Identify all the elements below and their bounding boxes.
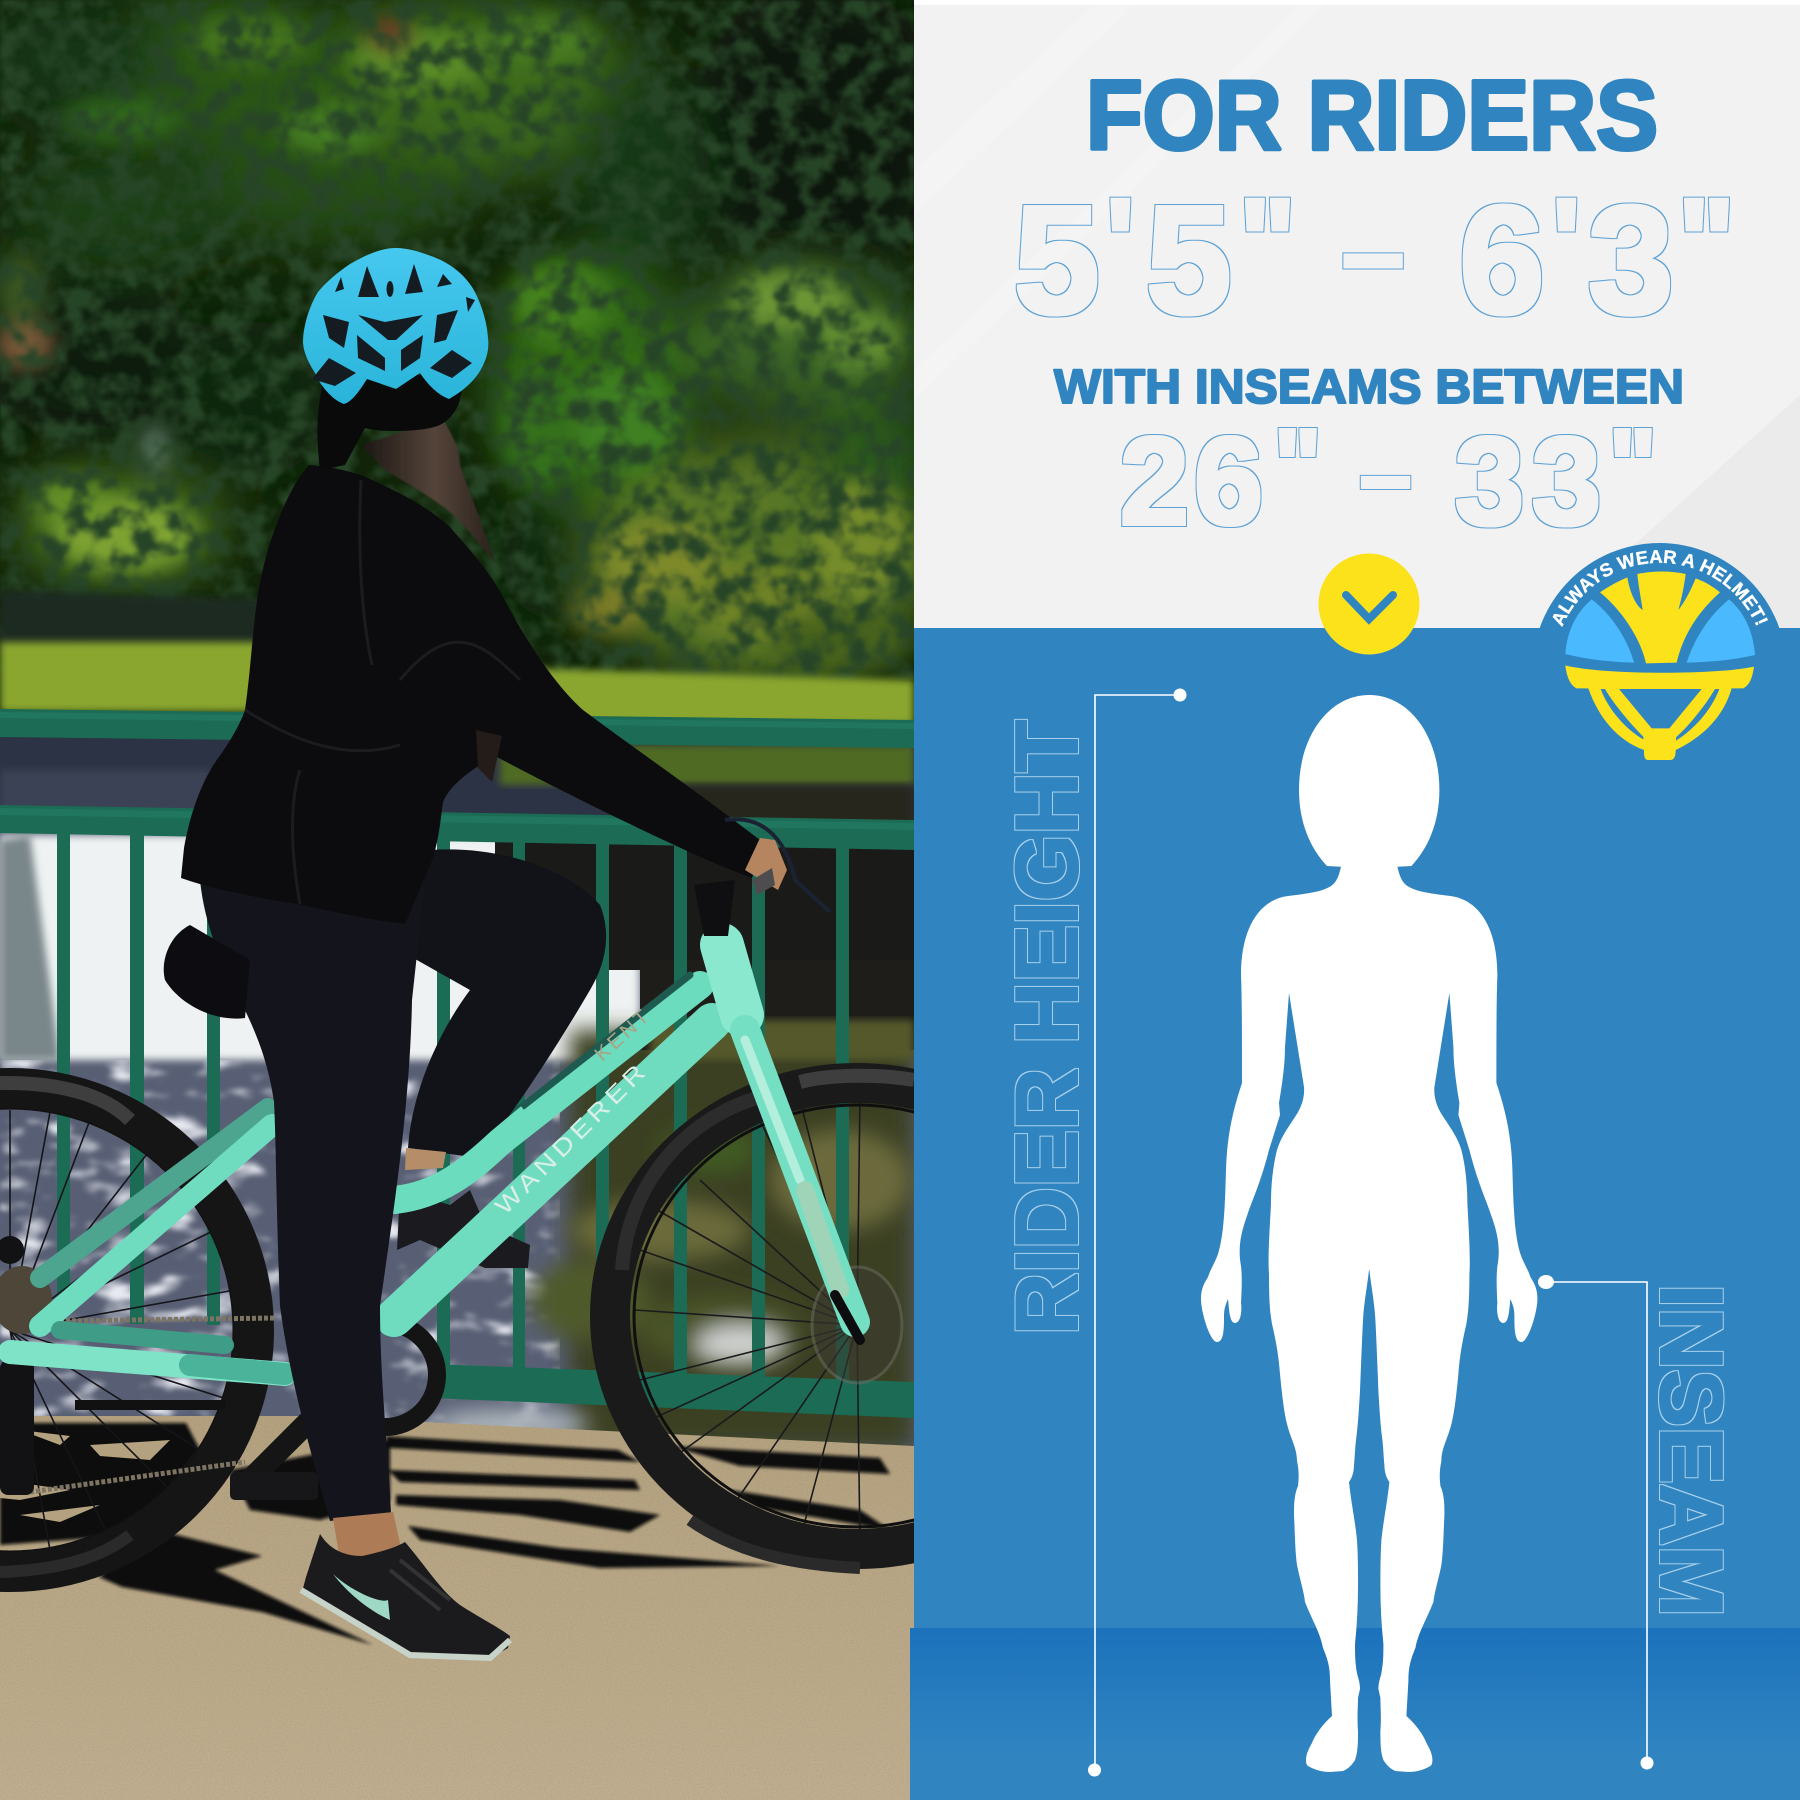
- yellow chevron badge: [1318, 554, 1420, 654]
- rider jacket: [181, 465, 764, 924]
- dark river bank: [0, 590, 257, 644]
- human silhouette: [1201, 695, 1537, 1772]
- outlined inseam range: 2: [1120, 413, 1189, 551]
- hand and grip: [694, 819, 830, 936]
- water behind upper rail: [0, 735, 914, 825]
- chainring: [380, 1323, 446, 1436]
- panel: rider photo: [0, 0, 914, 1800]
- subheading: inseams: WITH INSEAMS BETWEEN: [1054, 361, 1684, 414]
- helmet badge: [1540, 543, 1780, 760]
- light spots inside rear wheel shadow: [0, 1430, 170, 1522]
- outlined inseam range: ": [1274, 409, 1321, 521]
- rider ankle: [333, 1512, 402, 1560]
- helmet centre vent: [386, 281, 394, 297]
- waterfall and rocks below: [0, 830, 914, 1450]
- inseam label: INSEAM: [1642, 1284, 1741, 1617]
- pavement grain: [0, 1416, 914, 1800]
- silhouette right half: [1367, 695, 1537, 1772]
- pavement shadows: [0, 1423, 890, 1645]
- chain: [30, 1318, 275, 1492]
- outlined inseam range: 3: [1532, 413, 1601, 551]
- rear wheel: [0, 1083, 254, 1572]
- jacket seams: [245, 480, 520, 904]
- heading: for riders: FOR RIDERS: [1086, 60, 1658, 170]
- outlined height range: ": [1239, 174, 1296, 308]
- outlined height range: 5: [1146, 174, 1232, 346]
- helmet icon: [1565, 571, 1755, 760]
- inseam measure line: [1538, 1275, 1654, 1770]
- pavement: [0, 1416, 914, 1800]
- outlined inseam range: 6: [1194, 413, 1263, 551]
- pedal: [230, 1472, 318, 1500]
- top tube model label: KENT: [591, 1004, 656, 1066]
- rear derailleur and cassette: [0, 1236, 225, 1495]
- rider standing leg: [200, 880, 425, 1521]
- outlined height range: –: [1342, 190, 1404, 315]
- rider shoe: [301, 1534, 510, 1658]
- outlined inseam range: –: [1360, 425, 1411, 527]
- frame top tube over shin: [395, 1117, 530, 1200]
- saddle: [164, 925, 250, 1019]
- outlined inseam range: ": [1609, 409, 1656, 521]
- helmet: [303, 248, 488, 404]
- outlined height range: 6: [1459, 174, 1545, 346]
- fence rail highlight: [0, 712, 914, 830]
- outlined height range: ': [1106, 174, 1135, 308]
- raised leg ankle: [405, 1148, 446, 1170]
- fence: [0, 709, 914, 1418]
- rider hair: [361, 419, 495, 562]
- outlined height range: ': [1552, 174, 1581, 308]
- helmet vents: [312, 264, 475, 386]
- brake disc: [812, 1267, 902, 1383]
- re-drawn down tube over shoe: [394, 1163, 560, 1318]
- outlined height range: ": [1678, 174, 1735, 308]
- rider height label: RIDER HEIGHT: [997, 720, 1096, 1335]
- outlined inseam range: 3: [1455, 413, 1524, 551]
- rider height measure line: [1088, 688, 1186, 1776]
- panel: rider info background: [914, 0, 1800, 1800]
- outlined height range: 3: [1588, 174, 1674, 346]
- green pond: [0, 642, 914, 725]
- badge arc text: ALWAYS WEAR A HELMET!: [1552, 550, 1768, 627]
- head under helmet: [318, 375, 462, 470]
- frame lettering: WANDERER: [490, 1056, 654, 1220]
- front wheel: [590, 1063, 914, 1574]
- bike frame: [10, 945, 860, 1374]
- outlined height range: 5: [1014, 174, 1100, 346]
- forest backdrop: [0, 0, 950, 720]
- rider raised leg: [408, 849, 606, 1158]
- raised foot shoe: [397, 1190, 530, 1268]
- crank and pedal: [246, 1414, 308, 1469]
- hair wisp: [476, 730, 502, 782]
- floor band: [910, 1628, 1800, 1800]
